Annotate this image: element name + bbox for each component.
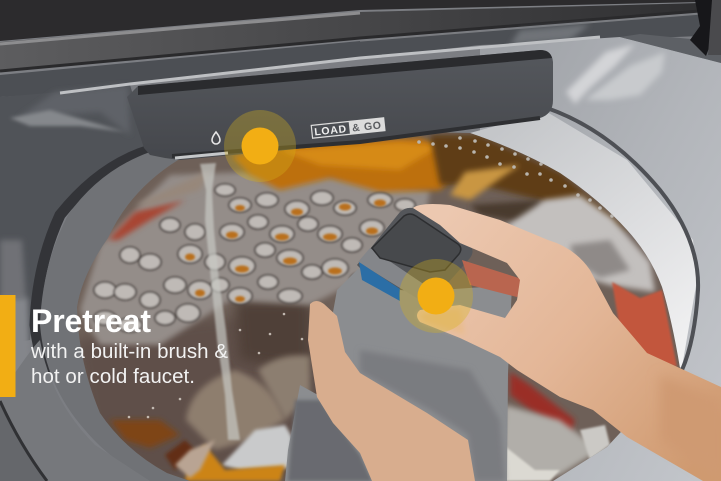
red garment <box>612 282 677 367</box>
device body <box>357 208 473 294</box>
lower left ring <box>0 340 150 481</box>
brown cloth bundles <box>186 370 285 450</box>
lid dark top <box>0 0 721 41</box>
dimples <box>94 184 422 332</box>
callout: yellow dot dispenser <box>224 110 296 182</box>
right deck <box>480 37 721 481</box>
hinge <box>690 0 712 56</box>
bottom white laundry right <box>507 402 590 481</box>
dimple orange centers <box>185 200 416 302</box>
blue brush strip <box>359 262 400 301</box>
body text <box>30 340 228 388</box>
body text: hot or cold faucet. <box>31 365 195 388</box>
brush pad <box>372 214 461 272</box>
top orange garment <box>232 138 480 192</box>
hand <box>413 204 721 481</box>
ring groove right <box>547 108 698 370</box>
callout: yellow dot brush <box>399 259 473 333</box>
ring groove left <box>35 150 150 375</box>
LOAD & GO badge: & GO <box>352 120 382 135</box>
icon: water drop <box>212 132 220 144</box>
dimpled metal region <box>80 170 430 345</box>
right hand and arm <box>413 204 721 481</box>
left hand <box>308 301 475 481</box>
device lower shell <box>358 248 425 300</box>
lower brown region <box>80 317 316 480</box>
drum interior with laundry <box>60 120 700 481</box>
lid rail <box>0 2 721 70</box>
beads <box>417 136 614 218</box>
dispenser panel <box>60 37 600 160</box>
water stream <box>200 163 240 440</box>
perforation dots <box>128 313 303 418</box>
shirt shading <box>360 350 505 481</box>
orange garment bottom <box>110 420 180 448</box>
grey white laundry right <box>500 195 655 292</box>
caption <box>30 303 228 388</box>
lower left corner <box>0 403 47 481</box>
red accent top-left <box>108 200 185 240</box>
left deck <box>0 85 150 345</box>
white inner ring <box>470 112 697 367</box>
white cloth bottom <box>222 425 300 470</box>
panel lower lip <box>172 118 540 156</box>
drum top perforated wall <box>430 135 630 232</box>
body text: with a built-in brush & <box>30 340 228 363</box>
grey shirt <box>285 265 512 481</box>
panel top shadow strip <box>138 50 552 95</box>
hand shading <box>660 375 721 480</box>
LOAD & GO badge <box>311 117 386 139</box>
middle finger <box>462 260 525 297</box>
LOAD & GO badge: LOAD <box>314 123 347 139</box>
brush device <box>357 208 473 301</box>
grey left ring <box>40 152 190 481</box>
panel body <box>127 50 553 160</box>
heading: Pretreat <box>31 303 151 339</box>
yellow accent bar <box>0 295 16 397</box>
